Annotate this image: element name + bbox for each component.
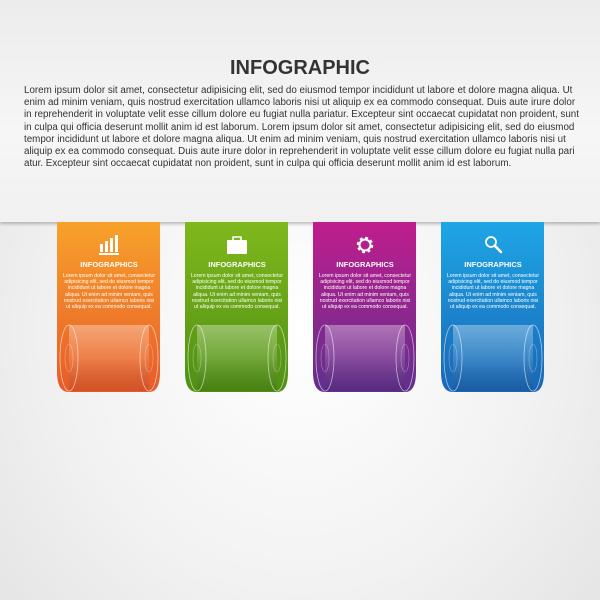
icon: briefcase bbox=[227, 236, 247, 254]
text block: intro bbox=[24, 85, 579, 169]
text block: intro: in culpa qui officia deserunt mollit anim id est laborum. Lorem ipsum dolor sit amet, consectetur adipisicing elit, sed do eiusmod bbox=[24, 122, 574, 133]
card text: Lorem ipsum dolor sit amet, consectetur adipisicing elit, sed do eiusmod tempor incididunt ut labore et dolore magna aliqua. Ut enim ad minim veniam, quis nostrud exercitation ullamco laboris nisi ut aliquip ex ea commodo consequat. bbox=[319, 273, 411, 310]
card text: INFOGRAPHICS bbox=[208, 260, 266, 269]
card text: INFOGRAPHICS bbox=[80, 260, 138, 269]
text block: intro: atur. Excepteur sint occaecat cupidatat non proident, sunt in culpa qui officia deserunt mollit anim id est laborum. bbox=[24, 158, 511, 169]
text block: intro: enim ad minim veniam, quis nostrud exercitation ullamco laboris nisi ut aliquip ex ea commodo consequat. Duis aute irure dolor bbox=[24, 97, 575, 108]
card 2: green bbox=[185, 222, 288, 392]
card 3: purple bbox=[313, 222, 416, 392]
card 4: blue bbox=[441, 222, 544, 392]
icon: bar chart bbox=[99, 235, 119, 255]
icon: gear bbox=[356, 236, 374, 254]
card text: Lorem ipsum dolor sit amet, consectetur adipisicing elit, sed do eiusmod tempor incididunt ut labore et dolore magna aliqua. Ut enim ad minim veniam, quis nostrud exercitation ullamco laboris nisi ut aliquip ex ea commodo consequat. bbox=[63, 273, 155, 310]
text block: intro: aliquip ex ea commodo consequat. Duis aute irure dolor in reprehenderit in voluptate velit esse cillum dolore eu fugiat nulla pari bbox=[24, 146, 575, 157]
title: INFOGRAPHIC bbox=[230, 57, 370, 79]
card text: INFOGRAPHICS bbox=[464, 260, 522, 269]
card 1: orange bbox=[57, 222, 160, 392]
card text: Lorem ipsum dolor sit amet, consectetur adipisicing elit, sed do eiusmod tempor incididunt ut labore et dolore magna aliqua. Ut enim ad minim veniam, quis nostrud exercitation ullamco laboris nisi ut aliquip ex ea commodo consequat. bbox=[191, 273, 283, 310]
text block: intro: Lorem ipsum dolor sit amet, consectetur adipisicing elit, sed do eiusmod tempor incididunt ut labore et dolore magna aliqua. Ut bbox=[24, 85, 572, 96]
icon: magnifier bbox=[485, 236, 502, 254]
card text: INFOGRAPHICS bbox=[336, 260, 394, 269]
text block: intro: tempor incididunt ut labore et dolore magna aliqua. Ut enim ad minim veniam, quis nostrud exercitation ullamco laboris nisi ut bbox=[24, 134, 566, 145]
card text: Lorem ipsum dolor sit amet, consectetur adipisicing elit, sed do eiusmod tempor incididunt ut labore et dolore magna aliqua. Ut enim ad minim veniam, quis nostrud exercitation ullamco laboris nisi ut aliquip ex ea commodo consequat. bbox=[447, 273, 539, 310]
text block: intro: in reprehenderit in voluptate velit esse cillum dolore eu fugiat nulla pariatur. Excepteur sint occaecat cupidatat non proident, sunt bbox=[24, 109, 579, 120]
top panel bbox=[0, 0, 600, 222]
